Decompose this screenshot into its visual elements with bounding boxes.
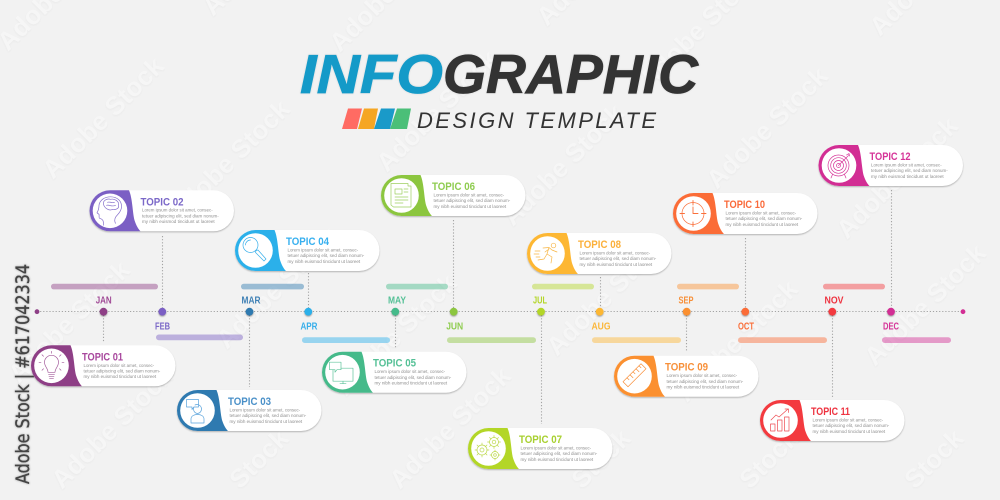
text: Adobe Stock <box>858 237 992 371</box>
text: Adobe Stock <box>2 254 136 388</box>
text block <box>230 408 307 425</box>
text block: Lorem ipsum dolor sit amet, consec- <box>871 162 942 168</box>
text block: Lorem ipsum dolor sit amet, consec- <box>520 446 592 452</box>
text: Adobe Stock <box>162 93 296 227</box>
title: TOPIC 10 <box>724 199 765 211</box>
subtitle: DESIGN TEMPLATE <box>417 108 656 133</box>
icon: monitor with chat bubble <box>330 362 353 384</box>
stock id watermark: Adobe Stock | #617042334 <box>12 264 34 484</box>
title: TOPIC 06 <box>432 181 475 193</box>
month labels: FEB <box>155 322 170 332</box>
title: TOPIC 02 <box>140 196 184 208</box>
text block: Lorem ipsum dolor sit amet, consec- <box>434 192 505 198</box>
timeline axis <box>37 310 963 312</box>
text block: tetuer adipiscing elit, sed diam nonum- <box>142 213 219 219</box>
text: Adobe Stock <box>329 267 463 401</box>
text block: tetuer adipiscing elit, sed diam nonum- <box>84 368 161 374</box>
text block: Lorem ipsum dolor sit amet, consec- <box>374 369 446 375</box>
month range bars <box>51 284 951 343</box>
card: topic 11 <box>760 400 904 441</box>
text block: tetuer adipiscing elit, sed diam nonum- <box>666 379 744 385</box>
month labels: JUL <box>533 296 547 307</box>
card: topic 10 <box>673 193 818 234</box>
text: Stock <box>223 423 295 494</box>
icon: light bulb <box>39 351 64 378</box>
text block: tetuer adipiscing elit, sed diam nonum- <box>288 253 365 259</box>
text block: tetuer adipiscing elit, sed diam nonum- <box>871 168 948 174</box>
text block <box>812 418 890 435</box>
month labels: JAN <box>96 296 112 307</box>
title: TOPIC 09 <box>665 362 708 374</box>
text block: tetuer adipiscing elit, sed diam nonum- <box>434 198 511 204</box>
text: Stock <box>898 423 970 494</box>
text: Adobe Stock <box>700 60 834 194</box>
icon: document <box>391 184 411 207</box>
title: TOPIC 07 <box>519 434 562 446</box>
title word: info: INFO <box>300 43 443 105</box>
connector lines <box>104 190 892 424</box>
text block: my nibh euismod tincidunt ut laoreet <box>288 259 361 265</box>
month labels: AUG <box>592 322 610 332</box>
title: TOPIC 03 <box>228 396 271 408</box>
text block <box>142 208 219 225</box>
text block <box>871 162 948 180</box>
text block: my nibh euismod tincidunt ut laoreet <box>812 429 886 435</box>
text block: Lorem ipsum dolor sit amet, consec- <box>230 408 301 414</box>
text block: my nibh euismod tincidunt ut laoreet <box>142 219 215 225</box>
text block <box>288 248 365 265</box>
text block: tetuer adipiscing elit, sed diam nonum- <box>520 451 598 457</box>
text block: Lorem ipsum dolor sit amet, consec- <box>142 208 213 214</box>
month labels <box>96 296 899 332</box>
icon: gears <box>475 436 500 460</box>
text block <box>374 369 452 387</box>
text block: tetuer adipiscing elit, sed diam nonum- <box>726 216 803 222</box>
text: Adobe Stock <box>496 97 630 231</box>
text: Adobe Stock <box>45 360 179 494</box>
text block: my nibh euismod tincidunt ut laoreet <box>230 419 303 425</box>
month labels: SEP <box>678 296 694 307</box>
month labels: OCT <box>738 322 754 332</box>
title: TOPIC 08 <box>578 239 621 251</box>
icon: person with speech bubble <box>186 400 204 423</box>
month labels: MAY <box>388 296 406 307</box>
text block <box>520 446 598 463</box>
month labels: NOV <box>824 296 844 307</box>
text block: Lorem ipsum dolor sit amet, consec- <box>726 210 797 216</box>
card: topic 06 <box>381 175 526 216</box>
text: Adobe Stock <box>370 43 504 177</box>
card: topic 05 <box>322 352 466 393</box>
icon: magnifying glass <box>243 238 266 261</box>
text block: my nibh euismod tincidunt ut laoreet <box>84 374 157 380</box>
text block: tetuer adipiscing elit, sed diam nonum- <box>374 375 452 381</box>
timeline dots <box>35 308 965 316</box>
title: TOPIC 11 <box>811 406 850 418</box>
card: topic 01 <box>31 345 176 386</box>
icon: ruler <box>623 364 646 387</box>
text block: tetuer adipiscing elit, sed diam nonum- <box>580 256 657 262</box>
text block <box>726 210 803 228</box>
text block: tetuer adipiscing elit, sed diam nonum- <box>812 423 890 429</box>
text: Stock <box>733 423 805 494</box>
card: topic 02 <box>90 190 234 231</box>
text block: Lorem ipsum dolor sit amet, consec- <box>84 363 155 369</box>
text: Stock <box>565 423 637 494</box>
text block <box>666 373 744 391</box>
text block: Lorem ipsum dolor sit amet, consec- <box>666 373 738 379</box>
text block: my nibh euismod tincidunt ut laoreet <box>374 381 448 387</box>
card: topic 07 <box>468 428 612 469</box>
text block: Lorem ipsum dolor sit amet, consec- <box>580 250 651 256</box>
text block: Lorem ipsum dolor sit amet, consec- <box>288 248 359 254</box>
text block: my nibh euismod tincidunt ut laoreet <box>666 385 740 391</box>
text: Adobe Stock <box>830 110 964 244</box>
card: topic 12 <box>818 145 963 186</box>
month labels: APR <box>300 322 318 332</box>
month labels: MAR <box>242 296 261 307</box>
card: topic 08 <box>527 233 672 274</box>
text block: Lorem ipsum dolor sit amet, consec- <box>812 418 884 424</box>
title: TOPIC 05 <box>373 358 416 370</box>
card: topic 03 <box>177 390 322 431</box>
text: Adobe Stock <box>36 50 170 184</box>
title: TOPIC 04 <box>286 236 330 248</box>
text block: my nibh euismod tincidunt ut laoreet <box>580 262 653 268</box>
text block: my nibh euismod tincidunt ut laoreet <box>871 174 944 180</box>
month labels: DEC <box>883 322 899 332</box>
text block: my nibh euismod tincidunt ut laoreet <box>434 204 507 210</box>
text: Adobe Stock <box>670 273 804 407</box>
text block: my nibh euismod tincidunt ut laoreet <box>726 222 799 228</box>
title: TOPIC 12 <box>870 151 910 163</box>
text: Adobe Stock <box>540 227 674 361</box>
text block <box>434 192 511 210</box>
colour stripes <box>342 108 411 129</box>
month labels: JUN <box>446 322 463 332</box>
title: TOPIC 01 <box>82 351 123 363</box>
card: topic 09 <box>614 356 758 397</box>
text block <box>580 250 657 268</box>
icon: head with brain <box>97 197 122 225</box>
title <box>300 43 699 105</box>
text: Adobe Stock <box>383 360 517 494</box>
text: Adobe Stock <box>210 220 344 354</box>
text block <box>84 363 161 380</box>
card: topic 04 <box>235 230 380 271</box>
icon: clock <box>680 200 706 226</box>
text block: tetuer adipiscing elit, sed diam nonum- <box>230 413 307 419</box>
icon: target <box>828 154 850 178</box>
icon: rising bar chart <box>770 409 789 431</box>
title word: graphic: GRAPHIC <box>443 43 699 105</box>
icon: running man <box>534 243 557 263</box>
text block: my nibh euismod tincidunt ut laoreet <box>520 457 594 463</box>
